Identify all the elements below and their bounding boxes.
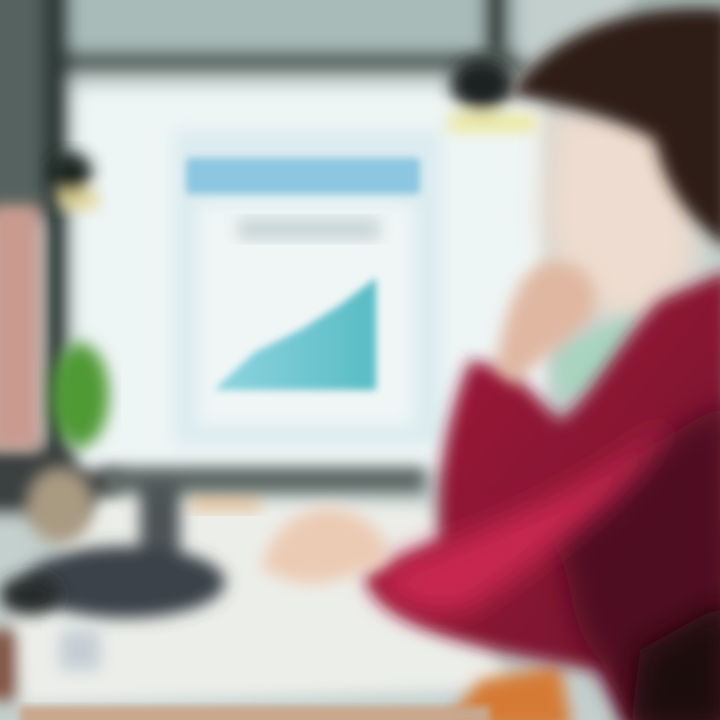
icon: upper lamp bbox=[448, 58, 538, 130]
hand on keyboard bbox=[262, 508, 388, 583]
heading: blurred blue title bar bbox=[186, 158, 420, 194]
sleeve highlight bbox=[375, 420, 670, 614]
icon: wall lamp bbox=[48, 152, 98, 208]
person bbox=[262, 8, 720, 720]
chart: rising teal area bars bbox=[214, 278, 376, 390]
monitor screen bbox=[76, 88, 546, 470]
sweater bbox=[365, 270, 720, 720]
face bbox=[540, 110, 700, 330]
sweater dark fold bbox=[540, 400, 720, 720]
hair bbox=[510, 8, 720, 250]
panel: chart card bbox=[174, 130, 442, 445]
desk surface bbox=[10, 492, 572, 720]
dark lower corner bbox=[630, 600, 720, 720]
left foreground objects bbox=[0, 467, 100, 700]
raised hand bbox=[495, 262, 596, 385]
icon: green plant bbox=[51, 343, 109, 447]
monitor stand and base bbox=[25, 468, 425, 618]
collar bbox=[555, 310, 640, 400]
text block: blurred subtitle bbox=[238, 218, 380, 240]
panel: pink left wall bbox=[0, 205, 40, 450]
